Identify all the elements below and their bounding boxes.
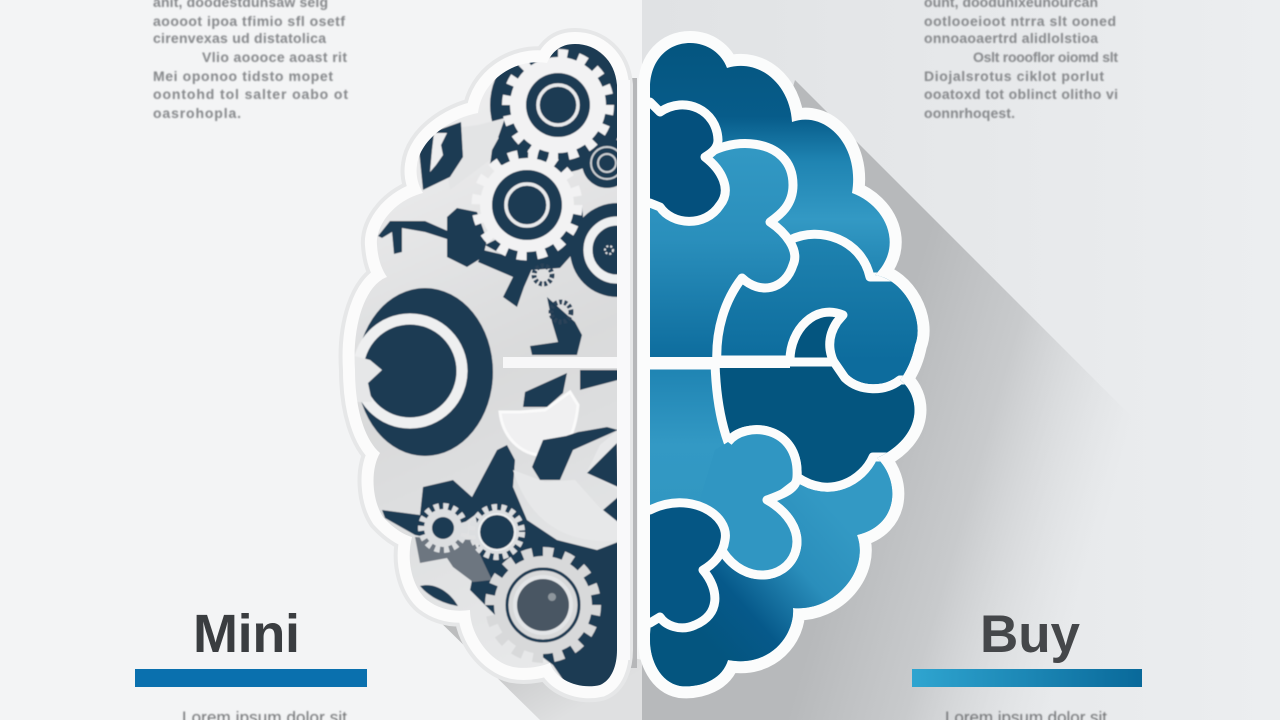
text block: top right: Diojalsrotus ciklot porlut [924,68,1104,84]
right hemisphere: puzzle [640,30,940,702]
gear: middle [477,155,577,255]
dark diagonal connector [478,250,535,307]
small lobe cog [419,122,463,190]
bar: Buy [912,669,1142,687]
left hemisphere interior [354,44,617,686]
gear: bottom large [491,553,595,657]
dark hex lower left [382,480,476,536]
top inner dark lobe [640,102,725,221]
bar: Mini [135,669,367,687]
gear: lower middle small [473,508,521,556]
text block: top left [153,0,348,121]
bottom inner dark lobe [640,503,725,628]
horizontal white bar: left [503,357,630,368]
text block: top right: Oslt roooflor oiomd slt [973,49,1118,65]
lower centre lobe outline [723,430,797,575]
white lobe under bar [500,392,578,455]
centre divider shadow [630,78,637,668]
centre piece [640,144,795,365]
text block: top right: onnoaoaertrd alidlolstioa [924,30,1098,46]
small chain gears [534,266,571,322]
lower right gradient piece [640,457,940,700]
lower dark piece [715,362,940,487]
right hemisphere pieces [650,43,918,686]
dark strip left [378,221,450,254]
text block: top right [924,0,1118,121]
grey cog shape [415,537,492,582]
lower centre lobe [700,430,797,575]
text block: top left: Vlio aoooce aoast rit [202,49,347,65]
dark area behind top gear [489,44,617,173]
mid blue piece right [715,234,940,389]
dark band behind middle gear [485,205,585,270]
dark hook [530,297,582,355]
heading: Buy: Buy [980,605,1081,664]
background: right panel [642,0,1280,720]
long shadow: right [642,80,1280,720]
dark triangle between gears [490,138,510,166]
dark band [580,370,618,390]
cog right, white ring [582,216,617,284]
dark hexagon [447,208,487,267]
left hemisphere outline [355,44,617,686]
text block: top left: cirenvexas ud distatolica [153,30,326,46]
text block: top left: Mei oponoo tidsto mopet [153,68,333,84]
text block: top right: oonnrhoqest. [924,105,1015,121]
white notch in small lobe [430,133,447,172]
vertical white bar: left [617,80,630,660]
text block: top left: aoooot ipoa tfimio sfl osetf [153,13,345,29]
dark fragment small [603,497,618,522]
text block: top left: oontohd tol salter oabo ot [153,86,348,102]
dark arc top [523,373,567,407]
upper blue base [650,43,918,365]
white lobe lower [512,432,617,486]
lower dark mass [470,445,618,690]
dark piece under notch [794,316,835,358]
text block: top right: ooatoxd tot oblinct olitho vi [924,86,1118,102]
gear: lower left small [422,507,464,549]
lower blue base [650,362,914,686]
dark fragment [587,443,618,487]
gear: small right [582,139,617,188]
cog right, specks [605,246,613,254]
large ring gear [340,288,493,456]
brain illustration [340,30,940,702]
heading: Mini: Mini [193,604,300,664]
horizontal white bar: right [640,357,790,368]
text block: top left: oasrohopla. [153,105,241,121]
text block: top right: ootlooeioot ntrra slt ooned [924,13,1116,29]
gear: top [507,54,609,156]
right hemisphere white outline [650,43,918,686]
background: left panel [0,0,642,720]
small eye [420,585,458,606]
jagged dark gear [532,427,618,480]
cog right, ring [570,202,617,298]
left hemisphere: gears [340,30,664,700]
light wedge under top gear [492,118,505,138]
long shadow: left [428,610,642,720]
